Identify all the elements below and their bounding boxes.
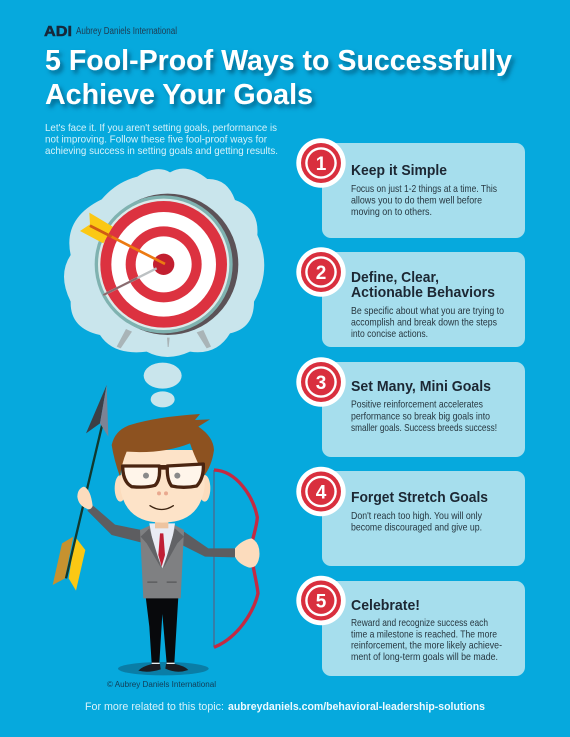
illustration: thought cloud with target	[64, 169, 264, 407]
footer link line: For more related to this topic:	[85, 701, 224, 713]
body 1: allows you to do them well before	[351, 196, 482, 206]
badge 3: 3	[316, 373, 326, 394]
copyright: © Aubrey Daniels International	[107, 680, 216, 689]
shirt	[149, 523, 175, 568]
ears	[115, 475, 210, 502]
body 2: into concise actions.	[351, 329, 428, 340]
badge 5	[296, 576, 346, 625]
heading 4: Forget Stretch Goals	[351, 489, 488, 506]
title	[45, 45, 512, 111]
badge 1: 1	[316, 154, 327, 175]
panel: step 5	[296, 576, 525, 676]
panel: step 4	[296, 467, 525, 566]
nose	[157, 491, 168, 495]
body 4: Don't reach too high. You will only	[351, 511, 483, 522]
badge 5: 5	[316, 592, 327, 612]
badge 1	[296, 138, 346, 188]
lapels	[141, 528, 184, 568]
left hand	[77, 487, 93, 509]
hair	[112, 414, 214, 477]
panel: step 2	[296, 247, 525, 347]
intro text: not improving. Follow these five fool-proof ways for	[45, 134, 267, 146]
body 2	[351, 306, 504, 340]
body 1: Focus on just 1-2 things at a time. This	[351, 184, 497, 195]
body 1: moving on to others.	[351, 207, 432, 218]
badge 2	[296, 247, 346, 297]
body 3	[351, 400, 497, 434]
body 3: performance so break big goals into	[351, 411, 490, 422]
badge 2: 2	[316, 263, 326, 284]
heading 2: Actionable Behaviors	[351, 284, 495, 301]
footer link line: aubreydaniels.com/behavioral-leadership-solutions	[228, 701, 485, 713]
logo: ADI Aubrey Daniels International: ADI	[44, 23, 72, 40]
body 5: time a milestone is reached. The more	[351, 629, 497, 640]
intro text: Let's face it. If you aren't setting goals, performance is	[45, 122, 277, 134]
body 5: reinforcement, the more likely achieve-	[351, 641, 502, 652]
footer link line	[85, 701, 485, 713]
heading 3: Set Many, Mini Goals	[351, 378, 491, 395]
badge 4	[296, 467, 346, 516]
target board	[95, 194, 238, 335]
face	[120, 450, 205, 523]
socks	[152, 663, 175, 664]
pockets	[147, 581, 177, 583]
body 4	[351, 511, 483, 534]
panel: step 3	[296, 357, 525, 457]
held arrow	[53, 385, 108, 591]
arrow in bullseye	[80, 213, 165, 264]
heading 5: Celebrate!	[351, 597, 420, 614]
body 2: accomplish and break down the steps	[351, 318, 497, 328]
heading 1: Keep it Simple	[351, 162, 447, 179]
glasses	[123, 464, 203, 487]
neck	[155, 517, 168, 528]
intro text: achieving success in setting goals and getting results.	[45, 145, 278, 157]
thought cloud	[64, 169, 264, 407]
jacket	[140, 524, 184, 598]
illustration: businessman with bow and arrow	[53, 385, 260, 675]
legs	[146, 597, 178, 663]
heading 2	[351, 269, 495, 301]
ground shadow	[118, 662, 209, 675]
eyes	[143, 473, 180, 479]
bow	[214, 470, 258, 647]
badge 4: 4	[316, 482, 327, 504]
tie	[158, 533, 165, 567]
shoes	[138, 664, 188, 672]
logo: ADI Aubrey Daniels International	[44, 23, 177, 40]
smile	[150, 506, 173, 509]
heading 2: Define, Clear,	[351, 269, 439, 286]
body 4: become discouraged and give up.	[351, 523, 482, 534]
target stand legs	[117, 329, 211, 348]
intro text	[45, 122, 278, 157]
body 5: Reward and recognize success each	[351, 618, 488, 629]
body 3: smaller goals. Success breeds success!	[351, 423, 497, 434]
body 3: Positive reinforcement accelerates	[351, 400, 483, 411]
arms	[87, 505, 235, 557]
body 1	[351, 184, 497, 218]
title: 5 Fool-Proof Ways to Successfully	[45, 45, 512, 77]
body 5: ment of long-term goals will be made.	[351, 652, 498, 663]
body 2: Be specific about what you are trying to	[351, 306, 504, 317]
panel: step 1	[296, 138, 525, 238]
logo: ADI Aubrey Daniels International: Aubrey Daniels International	[76, 26, 177, 37]
badge 3	[296, 357, 346, 407]
title: Achieve Your Goals	[45, 79, 313, 111]
right hand	[235, 538, 260, 568]
body 5	[351, 618, 502, 663]
